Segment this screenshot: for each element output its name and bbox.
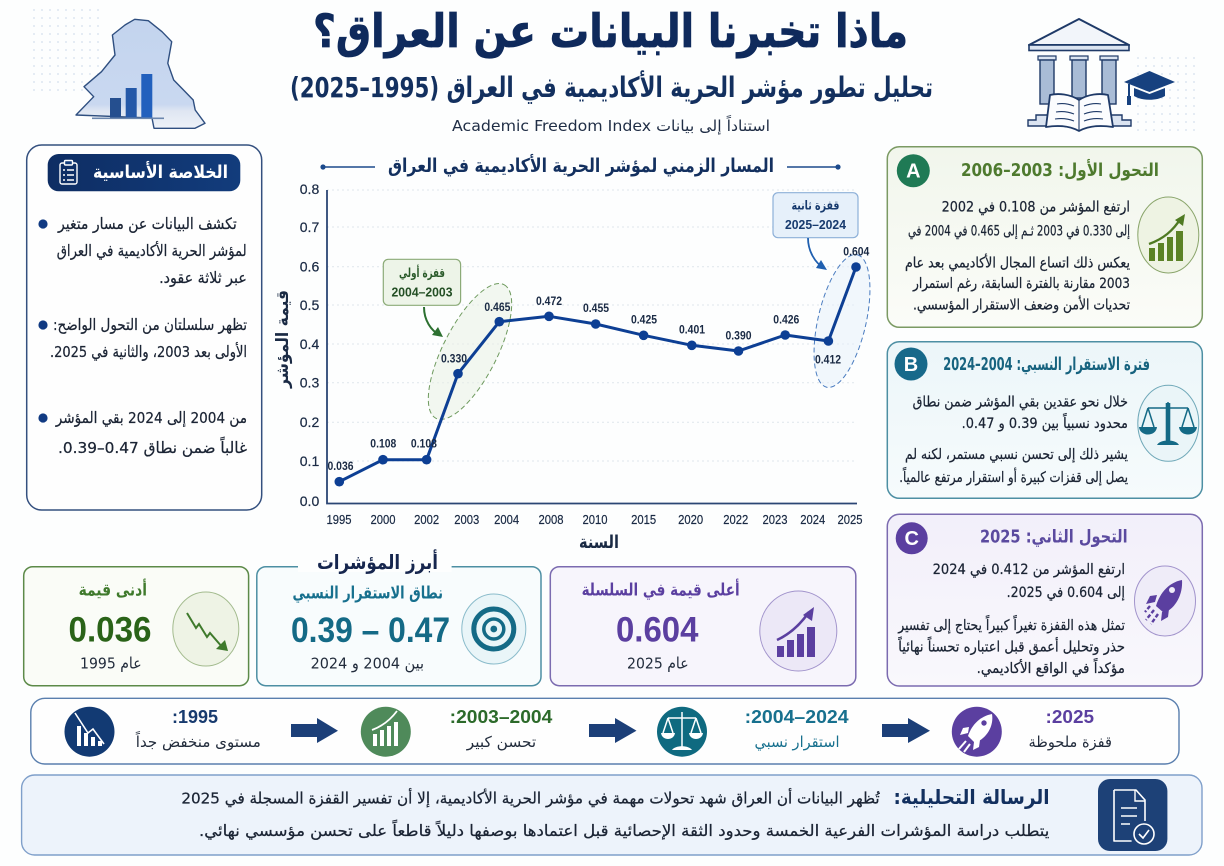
icon: Iraq map with bars — [33, 8, 205, 128]
message text — [181, 788, 1049, 841]
stage: 2025 — [952, 707, 1112, 757]
y axis: 0.0 — [300, 493, 319, 509]
x axis labels: 2020 — [678, 512, 703, 527]
data value labels: 0.036 — [328, 459, 354, 473]
panel C: second shift — [887, 514, 1202, 686]
kpi card: stability range: 0.39 – 0.47 — [291, 611, 450, 650]
arrow — [589, 718, 636, 743]
kpi card: stability range: بين 2004 و 2024 — [311, 654, 424, 674]
callout: first jump — [383, 259, 461, 305]
x axis labels: 2015 — [631, 512, 656, 527]
data value labels: 0.455 — [583, 301, 609, 315]
callout: second jump — [773, 193, 858, 238]
arrow — [882, 718, 930, 743]
text block B: خلال نحو عقدين بقي المؤشر ضمن نطاق — [913, 394, 1128, 410]
stage: 2004-2024: استقرار نسبي — [754, 733, 840, 752]
y axis: 0.1 — [300, 453, 319, 469]
panel: analytical message — [22, 775, 1202, 855]
stage: 2003-2004: 2004–2003: — [450, 707, 552, 727]
icon: university building, book and cap — [1028, 19, 1197, 136]
x axis labels: 2022 — [723, 512, 748, 527]
bullet one: لمؤشر الحرية الأكاديمية في العراق — [57, 241, 247, 261]
kpi card: lowest value: عام 1995 — [80, 654, 142, 672]
subtitle: تحليل تطور مؤشر الحرية الأكاديمية في العراق (1995–2025) — [290, 70, 933, 104]
message text: يتطلب دراسة المؤشرات الفرعية الخمسة وحدود الثقة الإحصائية قبل اعتمادها بوصفها دليلاً قاطعاً على تحسن مؤسسي نهائي. — [199, 820, 1049, 841]
kpi card: highest value — [550, 567, 856, 686]
panel B: relative stability — [887, 342, 1202, 498]
panel: key takeaways — [27, 145, 262, 510]
data value labels — [328, 244, 870, 473]
text block A: إلى 0.330 في 2003 ثـم إلى 0.465 في 2004 في — [908, 224, 1130, 240]
data value labels: 0.330 — [441, 352, 467, 366]
chart: academic freedom index timeline — [273, 154, 881, 553]
data value labels: 0.412 — [815, 352, 841, 366]
icon: target — [462, 594, 526, 664]
icon: rising bars — [1138, 197, 1199, 273]
y axis — [300, 181, 857, 509]
data value labels: 0.426 — [773, 312, 800, 326]
data value labels: 0.108 — [370, 436, 397, 450]
text block A: تحديات الأمن وضعف الاستقرار المؤسسي. — [913, 296, 1130, 314]
x axis labels: 2010 — [582, 512, 608, 527]
x axis labels: 2002 — [414, 512, 439, 527]
message heading: الرسالة التحليلية: — [894, 785, 1050, 809]
bullet one: تكشف البيانات عن مسار متغير — [57, 215, 237, 233]
stage: 2003-2004: تحسن كبير — [466, 733, 536, 751]
bullet three: غالباً ضمن نطاق 0.47–0.39. — [58, 437, 247, 457]
y axis: 0.4 — [300, 336, 319, 352]
x axis labels: 2003 — [454, 512, 479, 527]
arrow: first jump — [424, 307, 443, 337]
badge C — [896, 522, 928, 554]
timeline strip — [31, 698, 1179, 764]
y axis title: قيمة المؤشر — [273, 290, 293, 389]
text block A: ارتفع المؤشر من 0.108 في 2002 — [942, 200, 1130, 216]
bullet one — [38, 215, 247, 287]
bullet two: الأولى بعد 2003، والثانية في 2025. — [50, 342, 247, 362]
text block C: تمثل هذه القفزة تغيراً كبيراً يحتاج إلى تفسير — [897, 615, 1125, 635]
x axis labels: 1995 — [326, 512, 352, 527]
text block B: يشير ذلك إلى تحسن نسبي مستمر، لكنه لم — [905, 447, 1128, 463]
text block B — [899, 394, 1128, 486]
kpi card: stability range — [257, 567, 541, 686]
text block C: حذر وتحليل أعمق قبل اعتباره تحسناً نهائياً — [898, 636, 1125, 656]
kpi card: highest value: 0.604 — [616, 610, 699, 650]
text block C: ارتفع المؤشر من 0.412 في 2024 — [933, 562, 1125, 578]
chart title: المسار الزمني لمؤشر الحرية الأكاديمية في العراق — [388, 154, 774, 177]
stage: 2003-2004 — [361, 707, 552, 757]
kpi card: lowest value: 0.036 — [68, 610, 152, 650]
stage: 1995: 1995: — [172, 707, 218, 727]
badge A: A — [906, 160, 921, 182]
text block B: يصل إلى قفزات كبيرة أو استقرار مرتفع عالمياً. — [899, 467, 1128, 486]
stage: 2025: 2025: — [1046, 707, 1094, 727]
arrow: second jump — [808, 238, 827, 270]
title: ماذا تخبرنا البيانات عن العراق؟ — [313, 4, 908, 58]
badge C: C — [904, 528, 919, 550]
x axis title: السنة — [579, 532, 619, 553]
data value labels: 0.401 — [679, 322, 705, 336]
message text: تُظهر البيانات أن العراق شهد تحولات مهمة في مؤشر الحرية الأكاديمية، إلا أن تفسير القفزة المسجلة في 2025 — [181, 788, 881, 808]
icon: rocket — [1134, 566, 1196, 636]
badge B — [894, 348, 928, 380]
y axis: 0.3 — [300, 374, 319, 390]
highlight: first jump ellipse — [412, 272, 528, 431]
x axis labels — [326, 512, 862, 527]
text block B: محدود نسبياً بين 0.39 و 0.47. — [962, 413, 1128, 432]
heading C: التحول الثاني: 2025 — [980, 526, 1128, 548]
icon: falling trend — [173, 592, 239, 666]
stage: 2004-2024: 2024–2004: — [745, 707, 849, 727]
data value labels: 0.604 — [843, 244, 870, 258]
heading A: التحول الأول: 2003–2006 — [961, 159, 1159, 181]
y axis: 0.7 — [300, 219, 319, 235]
kpi section — [24, 548, 856, 686]
data line — [334, 262, 861, 487]
kpi card: lowest value: أدنى قيمة — [79, 578, 147, 600]
stage: 2004-2024 — [657, 707, 849, 757]
x axis labels: 2008 — [538, 512, 564, 527]
heading pill: key takeaways — [48, 154, 240, 191]
x axis labels: 2004 — [494, 512, 519, 527]
icon: document with check — [1098, 779, 1167, 851]
bullet two — [38, 316, 247, 362]
data value labels: 0.465 — [484, 300, 511, 314]
text block A: يعكس ذلك اتساع المجال الأكاديمي بعد عام — [905, 254, 1130, 272]
heading B: فترة الاستقرار النسبي: 2004–2024 — [943, 355, 1150, 375]
text block A: 2003 مقارنة بالفترة السابقة، رغم استمرار — [912, 276, 1130, 292]
highlight: second jump ellipse — [803, 249, 881, 393]
x axis labels: 2000 — [370, 512, 396, 527]
stage: 1995: مستوى منخفض جداً — [135, 731, 261, 751]
bullet two: تظهر سلسلتان من التحول الواضح: — [53, 316, 247, 335]
kpi card: lowest value — [24, 567, 249, 686]
bullet one: عبر ثلاثة عقود. — [159, 269, 247, 287]
y axis: 0.5 — [300, 297, 319, 313]
x axis labels: 2024 — [800, 512, 825, 527]
y axis: 0.8 — [300, 181, 319, 197]
data value labels: 0.425 — [631, 312, 657, 326]
bullet three — [38, 409, 247, 457]
badge A — [897, 154, 930, 187]
kpi card: highest value: عام 2025 — [627, 654, 689, 672]
x axis labels: 2025 — [838, 512, 862, 527]
text block C — [897, 562, 1125, 677]
panel A: first shift — [887, 147, 1202, 327]
icon: rising purple bars — [760, 591, 837, 671]
kpi section heading: أبرز المؤشرات — [317, 548, 438, 574]
kpi card: stability range: نطاق الاستقرار النسبي — [293, 584, 443, 604]
header — [33, 4, 1197, 136]
kpi card: highest value: أعلى قيمة في السلسلة — [582, 578, 740, 600]
source line: استناداً إلى بيانات Academic Freedom Index — [452, 115, 770, 135]
callout: second jump: 2024–2025 — [785, 217, 847, 232]
badge B: B — [904, 354, 918, 376]
data value labels: 0.472 — [536, 294, 562, 308]
icon: scales — [1138, 385, 1199, 461]
x axis labels: 2023 — [762, 512, 788, 527]
text block A — [905, 200, 1130, 314]
text block C: إلى 0.604 في 2025. — [1007, 585, 1125, 601]
data value labels: 0.108 — [411, 436, 437, 450]
icon: clipboard — [60, 160, 77, 184]
stage: 1995 — [64, 707, 261, 757]
y axis: 0.2 — [300, 414, 319, 430]
data value labels: 0.390 — [726, 328, 752, 342]
heading pill: key takeaways: الخلاصة الأساسية — [93, 161, 228, 183]
callout: first jump: 2003–2004 — [392, 284, 452, 300]
stage: 2025: قفزة ملحوظة — [1028, 733, 1112, 751]
callout: second jump: قفزة ثانية — [792, 198, 840, 212]
arrow — [291, 718, 338, 743]
callout: first jump: قفزة أولي — [399, 264, 445, 280]
y axis: 0.6 — [300, 258, 319, 274]
text block C: مؤكداً في الواقع الأكاديمي. — [977, 658, 1125, 677]
bullet three: من 2004 إلى 2024 بقي المؤشر — [55, 409, 247, 428]
